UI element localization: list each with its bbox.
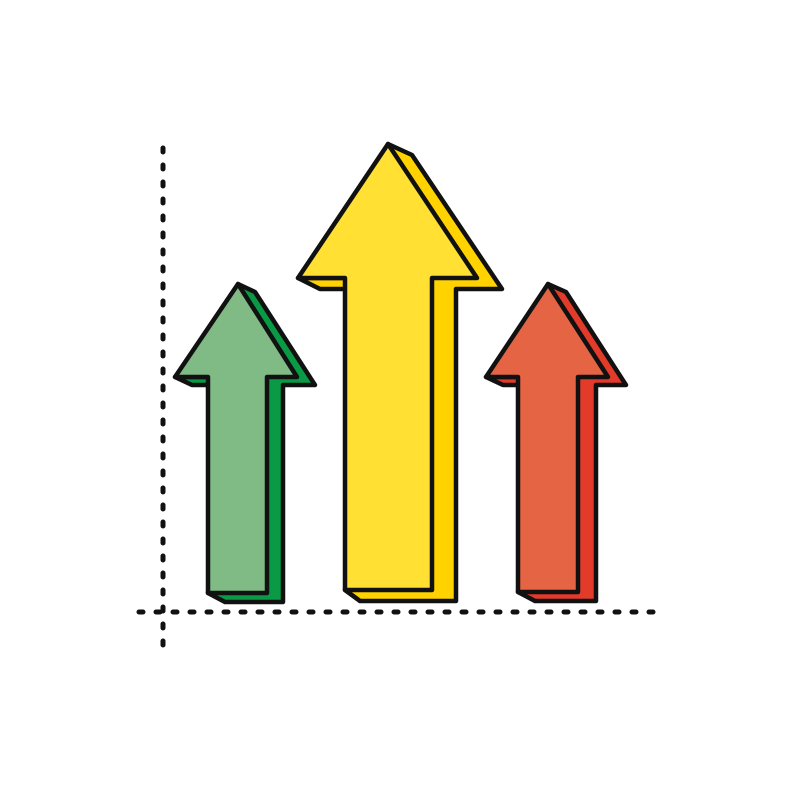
arrow: yellow xyxy=(298,144,502,601)
arrow: red xyxy=(486,284,626,601)
axes xyxy=(139,148,664,657)
arrow: green xyxy=(175,284,315,602)
